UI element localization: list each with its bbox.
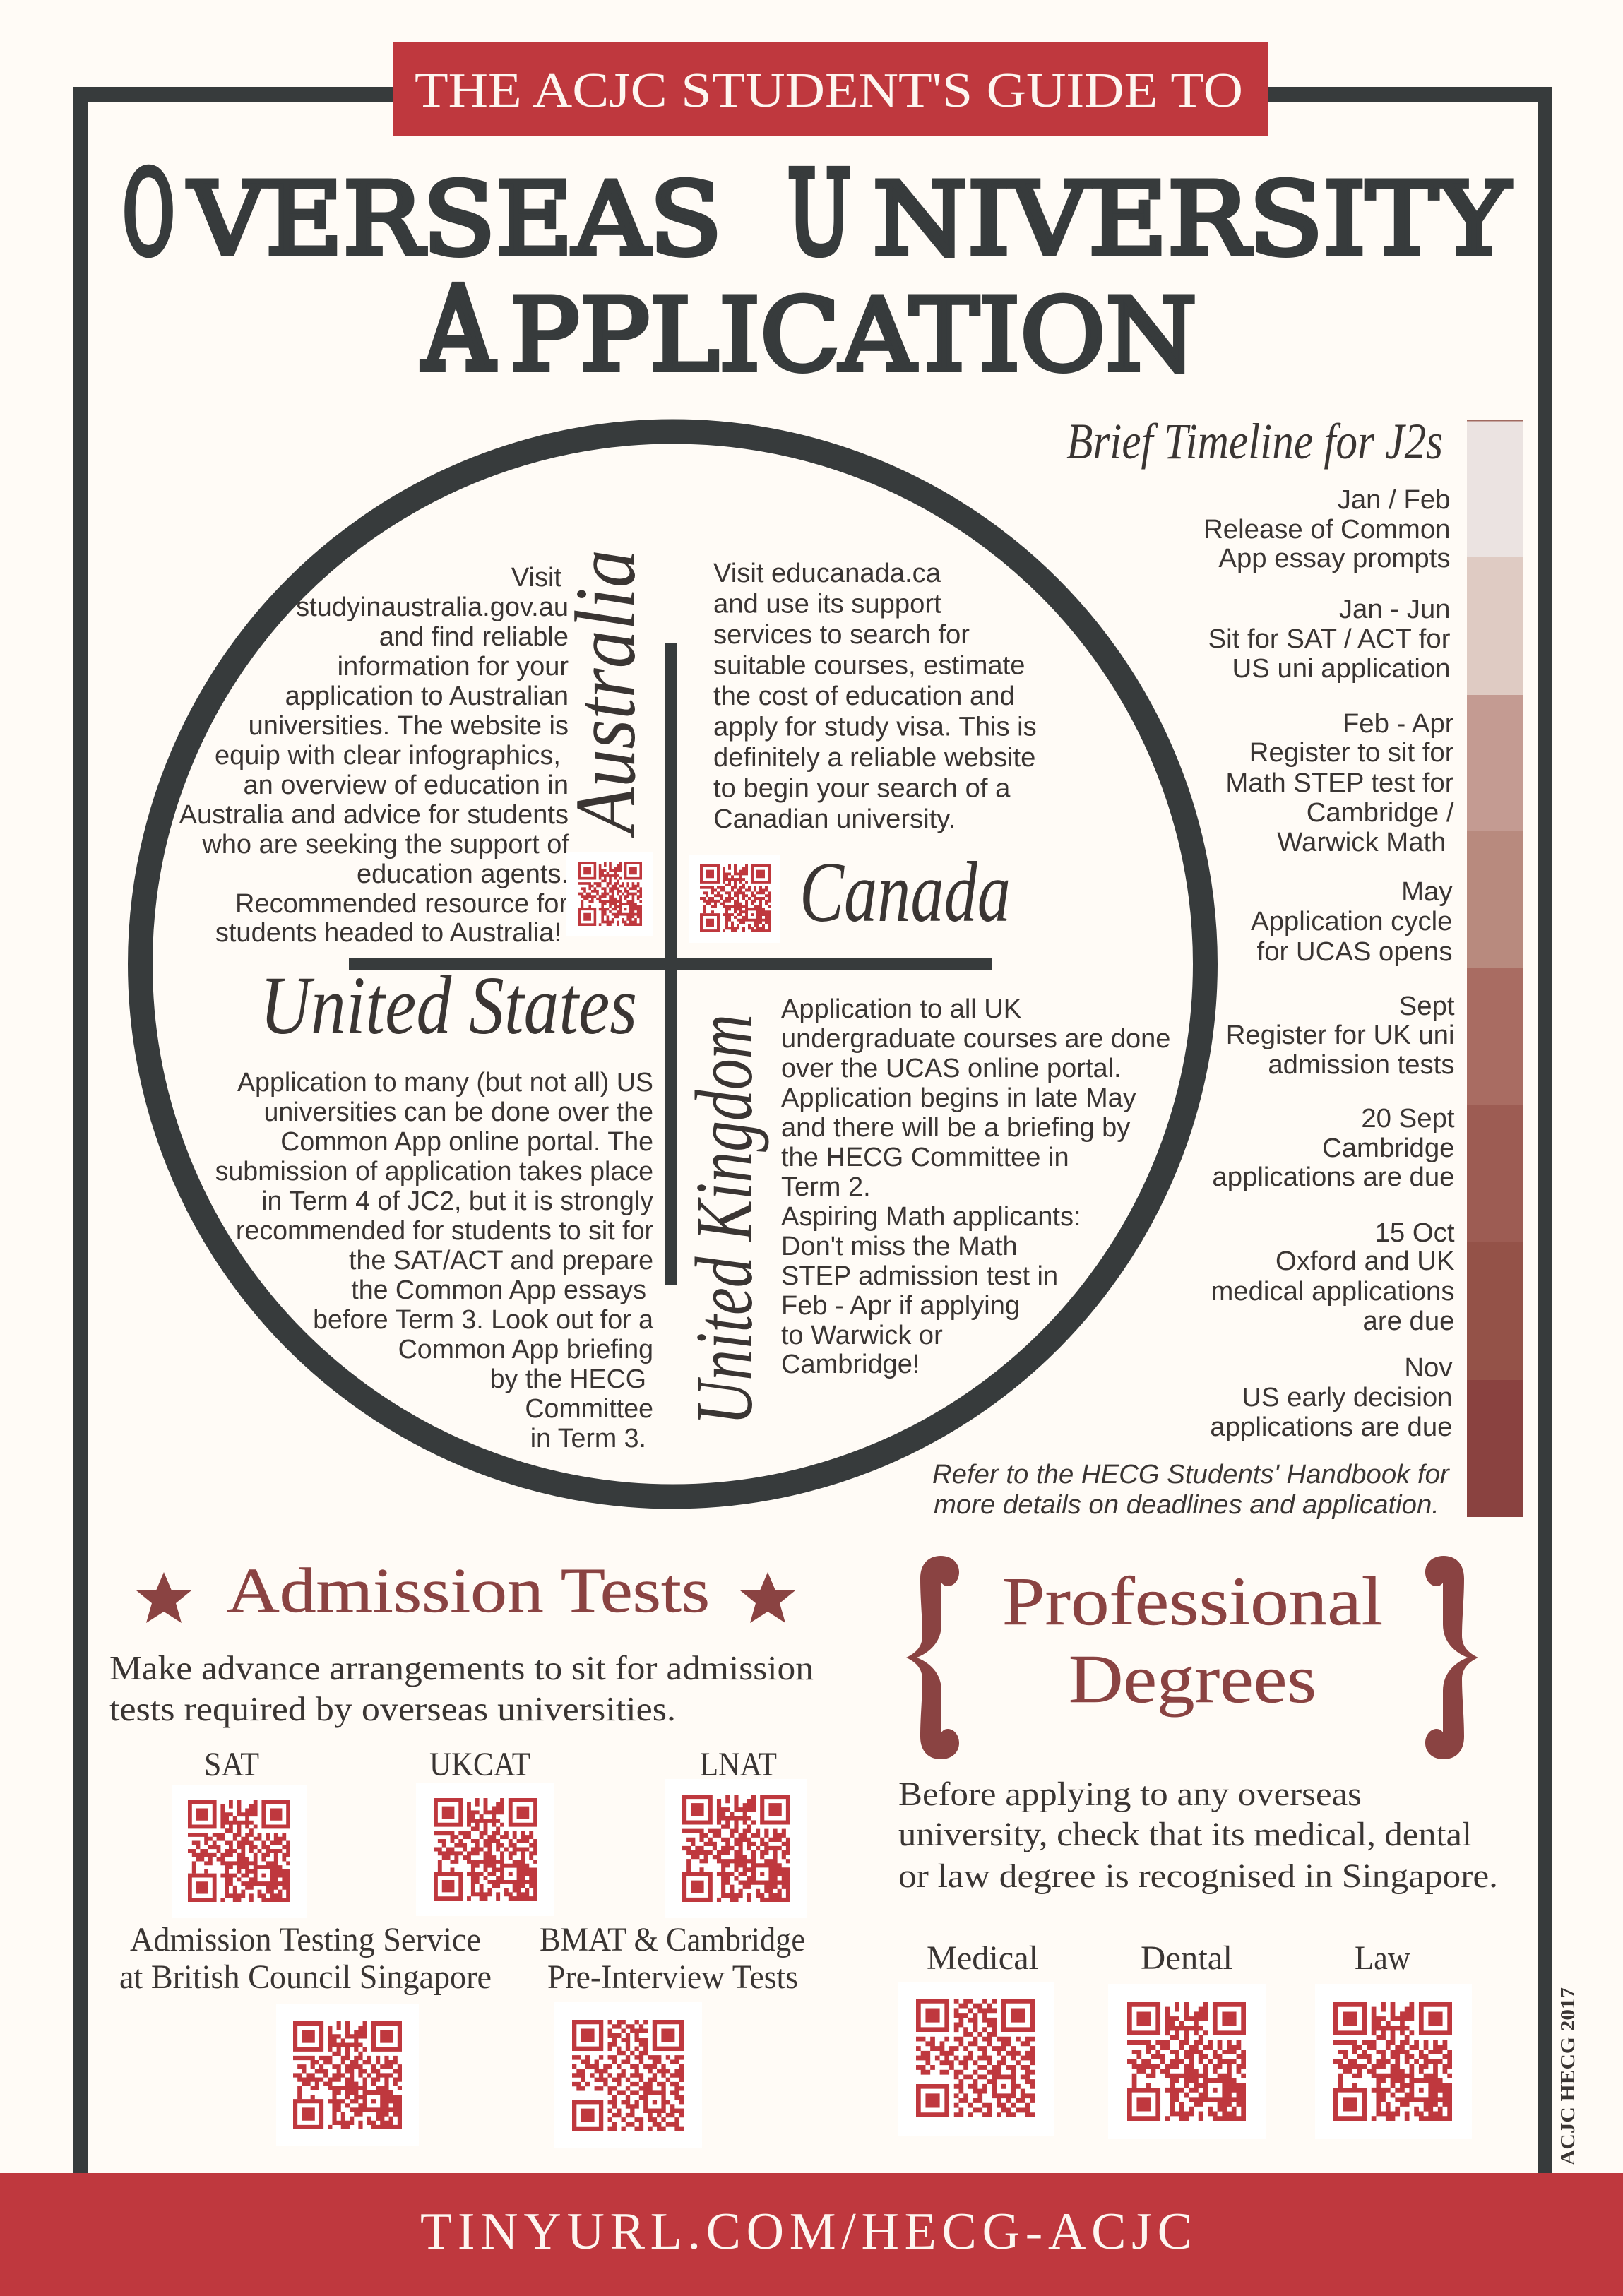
LNAT [665,1746,807,1918]
timeline entries: Feb - Apr [1343,708,1454,739]
text: Australia: and find reliable [379,622,569,652]
text: United Kingdom: Application begins in late May [781,1083,1136,1113]
timeline entries: Oxford and UK [1276,1246,1455,1276]
title: PPLICATION [510,277,1196,394]
text: United States: by the HECG [490,1364,646,1393]
text: Canada: apply for study visa. This is [713,712,1037,742]
timeline entries: Nov [1404,1352,1453,1383]
heading: Canada: Canada [799,845,1011,940]
text: United Kingdom: undergraduate courses are done [781,1024,1170,1054]
BMAT: Pre-Interview Tests [547,1958,798,1996]
intro text: tests required by overseas universities. [109,1689,676,1728]
text: Canada: services to search for [713,619,970,650]
Law: Law [1355,1939,1410,1977]
text: Australia: Australia and advice for students [179,800,569,830]
Admission Testing Service: at British Council Singapore [119,1958,492,1996]
text: Australia: equip with clear infographics, [215,741,561,771]
timeline entries: Math STEP test for [1225,768,1454,798]
text: Canada: definitely a reliable website [713,742,1035,773]
text: Canada: Canadian university. [713,804,956,834]
text: Australia: an overview of education in [243,771,569,800]
title: A [422,263,495,396]
text: United Kingdom: Application to all UK [781,994,1021,1024]
text: United States: the SAT/ACT and prepare [349,1245,653,1275]
timeline entries: US early decision [1242,1382,1452,1412]
text: United Kingdom: and there will be a briefing by [781,1113,1130,1143]
timeline entries: medical applications [1211,1276,1455,1307]
text: United States: before Term 3. Look out for a [313,1304,653,1334]
text: Australia: application to Australian [285,682,569,711]
text: United States: submission of application takes place [215,1156,653,1186]
LNAT: LNAT [700,1746,777,1783]
text: United States: in Term 4 of JC2, but it is strongly [261,1186,653,1215]
text: Australia: Visit [511,563,561,593]
text: United Kingdom: STEP admission test in [781,1261,1058,1291]
central circle [140,432,1205,1497]
text: United States: Application to many (but not all) US [237,1067,653,1097]
UKCAT [416,1746,554,1916]
timeline entries: admission tests [1268,1049,1455,1080]
timeline entries: for UCAS opens [1257,936,1452,967]
timeline entries: Cambridge / [1307,797,1454,828]
text: United Kingdom: over the UCAS online portal. [781,1054,1122,1083]
BMAT: BMAT & Cambridge [540,1921,805,1958]
footer URL: TINYURL.COM/HECG-ACJC [420,2203,1192,2261]
right brace [1425,1556,1478,1759]
timeline entries: US uni application [1232,653,1451,684]
text: United States: Committee [525,1393,653,1423]
text: United Kingdom: Cambridge! [781,1350,920,1379]
Dental: Dental [1141,1939,1232,1977]
text: United States: Common App online portal. The [280,1126,653,1156]
Dental [1108,1939,1266,2139]
Admission Testing Service: Admission Testing Service [130,1921,481,1958]
text: United Kingdom: Aspiring Math applicants: [781,1202,1081,1232]
BMAT [540,1921,805,2148]
timeline entries: Register for UK uni [1226,1020,1455,1050]
panel: United States [215,959,653,1453]
Medical: Medical [927,1939,1038,1977]
heading: timeline: Brief Timeline for J2s [1066,413,1443,470]
text: United States: the Common App essays [351,1275,646,1304]
text: United Kingdom: Term 2. [781,1172,871,1202]
text: United States: universities can be done over the [264,1097,653,1126]
timeline entries: Cambridge [1322,1133,1455,1163]
timeline entries: Jan - Jun [1339,594,1451,624]
SAT: SAT [204,1746,259,1783]
Admission Testing Service [119,1921,492,2146]
text: Australia: students headed to Australia! [215,918,561,948]
title [123,148,1511,396]
panel: Canada [689,558,1037,943]
intro text: university, check that its medical, dental [898,1816,1472,1853]
text: United Kingdom: the HECG Committee in [781,1143,1069,1172]
timeline entries: applications are due [1210,1412,1452,1442]
heading: United Kingdom: United Kingdom [679,1014,770,1425]
left brace [906,1556,959,1759]
footer band [0,2173,1623,2296]
text: Australia: information for your [338,652,569,682]
panel: timeline [932,413,1455,1520]
title: O [123,148,174,280]
banner text: THE ACJC STUDENT'S GUIDE TO [415,64,1243,118]
timeline entries: May [1401,876,1453,907]
timeline entries: Application cycle [1251,906,1452,936]
title: U [787,148,851,280]
star left [136,1572,191,1623]
timeline entries: 15 Oct [1375,1218,1455,1248]
text: Australia: Recommended resource for [235,889,568,919]
text: United States: in Term 3. [530,1423,646,1453]
cross divider [349,643,992,1285]
timeline entries: App essay prompts [1218,543,1451,573]
text: Australia: education agents. [357,859,569,889]
panel: admission tests [109,1556,814,2148]
heading: professional degrees: Degrees [1069,1641,1316,1718]
text: Canada: suitable courses, estimate [713,650,1025,681]
timeline colour bar [1467,420,1523,1517]
heading: Australia: Australia [558,549,653,838]
panel: Australia [179,549,653,948]
Law [1315,1939,1472,2139]
text: Australia: who are seeking the support of [201,830,569,859]
text: Canada: the cost of education and [713,681,1015,711]
text: Canada: to begin your search of a [713,773,1011,804]
header banner [393,42,1268,136]
SAT [172,1746,307,1918]
timeline entries: Warwick Math [1277,827,1446,857]
timeline entries: Jan / Feb [1338,484,1451,515]
text: United States: Common App briefing [398,1334,653,1364]
title: NIVERSITY [873,161,1511,278]
title: VERSEAS [187,161,722,278]
credit: ACJC HECG 2017 [1557,1987,1579,2165]
timeline entries: are due [1363,1306,1455,1336]
timeline entries: Sit for SAT / ACT for [1208,624,1451,654]
intro text: or law degree is recognised in Singapore. [898,1857,1498,1895]
timeline entries: Register to sit for [1249,737,1454,768]
Medical [898,1939,1054,2136]
timeline note: more details on deadlines and application. [934,1489,1439,1520]
intro text: Before applying to any overseas [898,1775,1362,1813]
timeline entries: applications are due [1212,1162,1455,1192]
QR code: Australia [566,852,653,936]
timeline entries: Release of Common [1203,514,1451,545]
timeline entries: 20 Sept [1361,1103,1455,1134]
heading: professional degrees: Professional [1002,1564,1383,1640]
heading: United States: United States [260,959,637,1052]
text: Australia: studyinaustralia.gov.au [296,593,569,622]
star right [740,1572,795,1623]
text: United Kingdom: Feb - Apr if applying [781,1291,1020,1321]
panel: professional degrees [898,1556,1498,2139]
text: United Kingdom: to Warwick or [781,1321,943,1350]
intro text: Make advance arrangements to sit for admission [109,1648,814,1687]
text: Australia: universities. The website is [249,711,569,741]
text: Canada: and use its support [713,589,941,619]
text: Canada: Visit educanada.ca [713,558,941,588]
QR code: Canada [689,855,780,943]
text: United States: recommended for students to sit for [236,1215,653,1245]
timeline note: Refer to the HECG Students' Handbook for [932,1459,1451,1489]
UKCAT: UKCAT [429,1746,530,1783]
heading: admission tests: Admission Tests [227,1556,710,1626]
panel: United Kingdom [679,994,1170,1425]
text: United Kingdom: Don't miss the Math [781,1232,1018,1261]
timeline entries: Sept [1399,991,1455,1021]
